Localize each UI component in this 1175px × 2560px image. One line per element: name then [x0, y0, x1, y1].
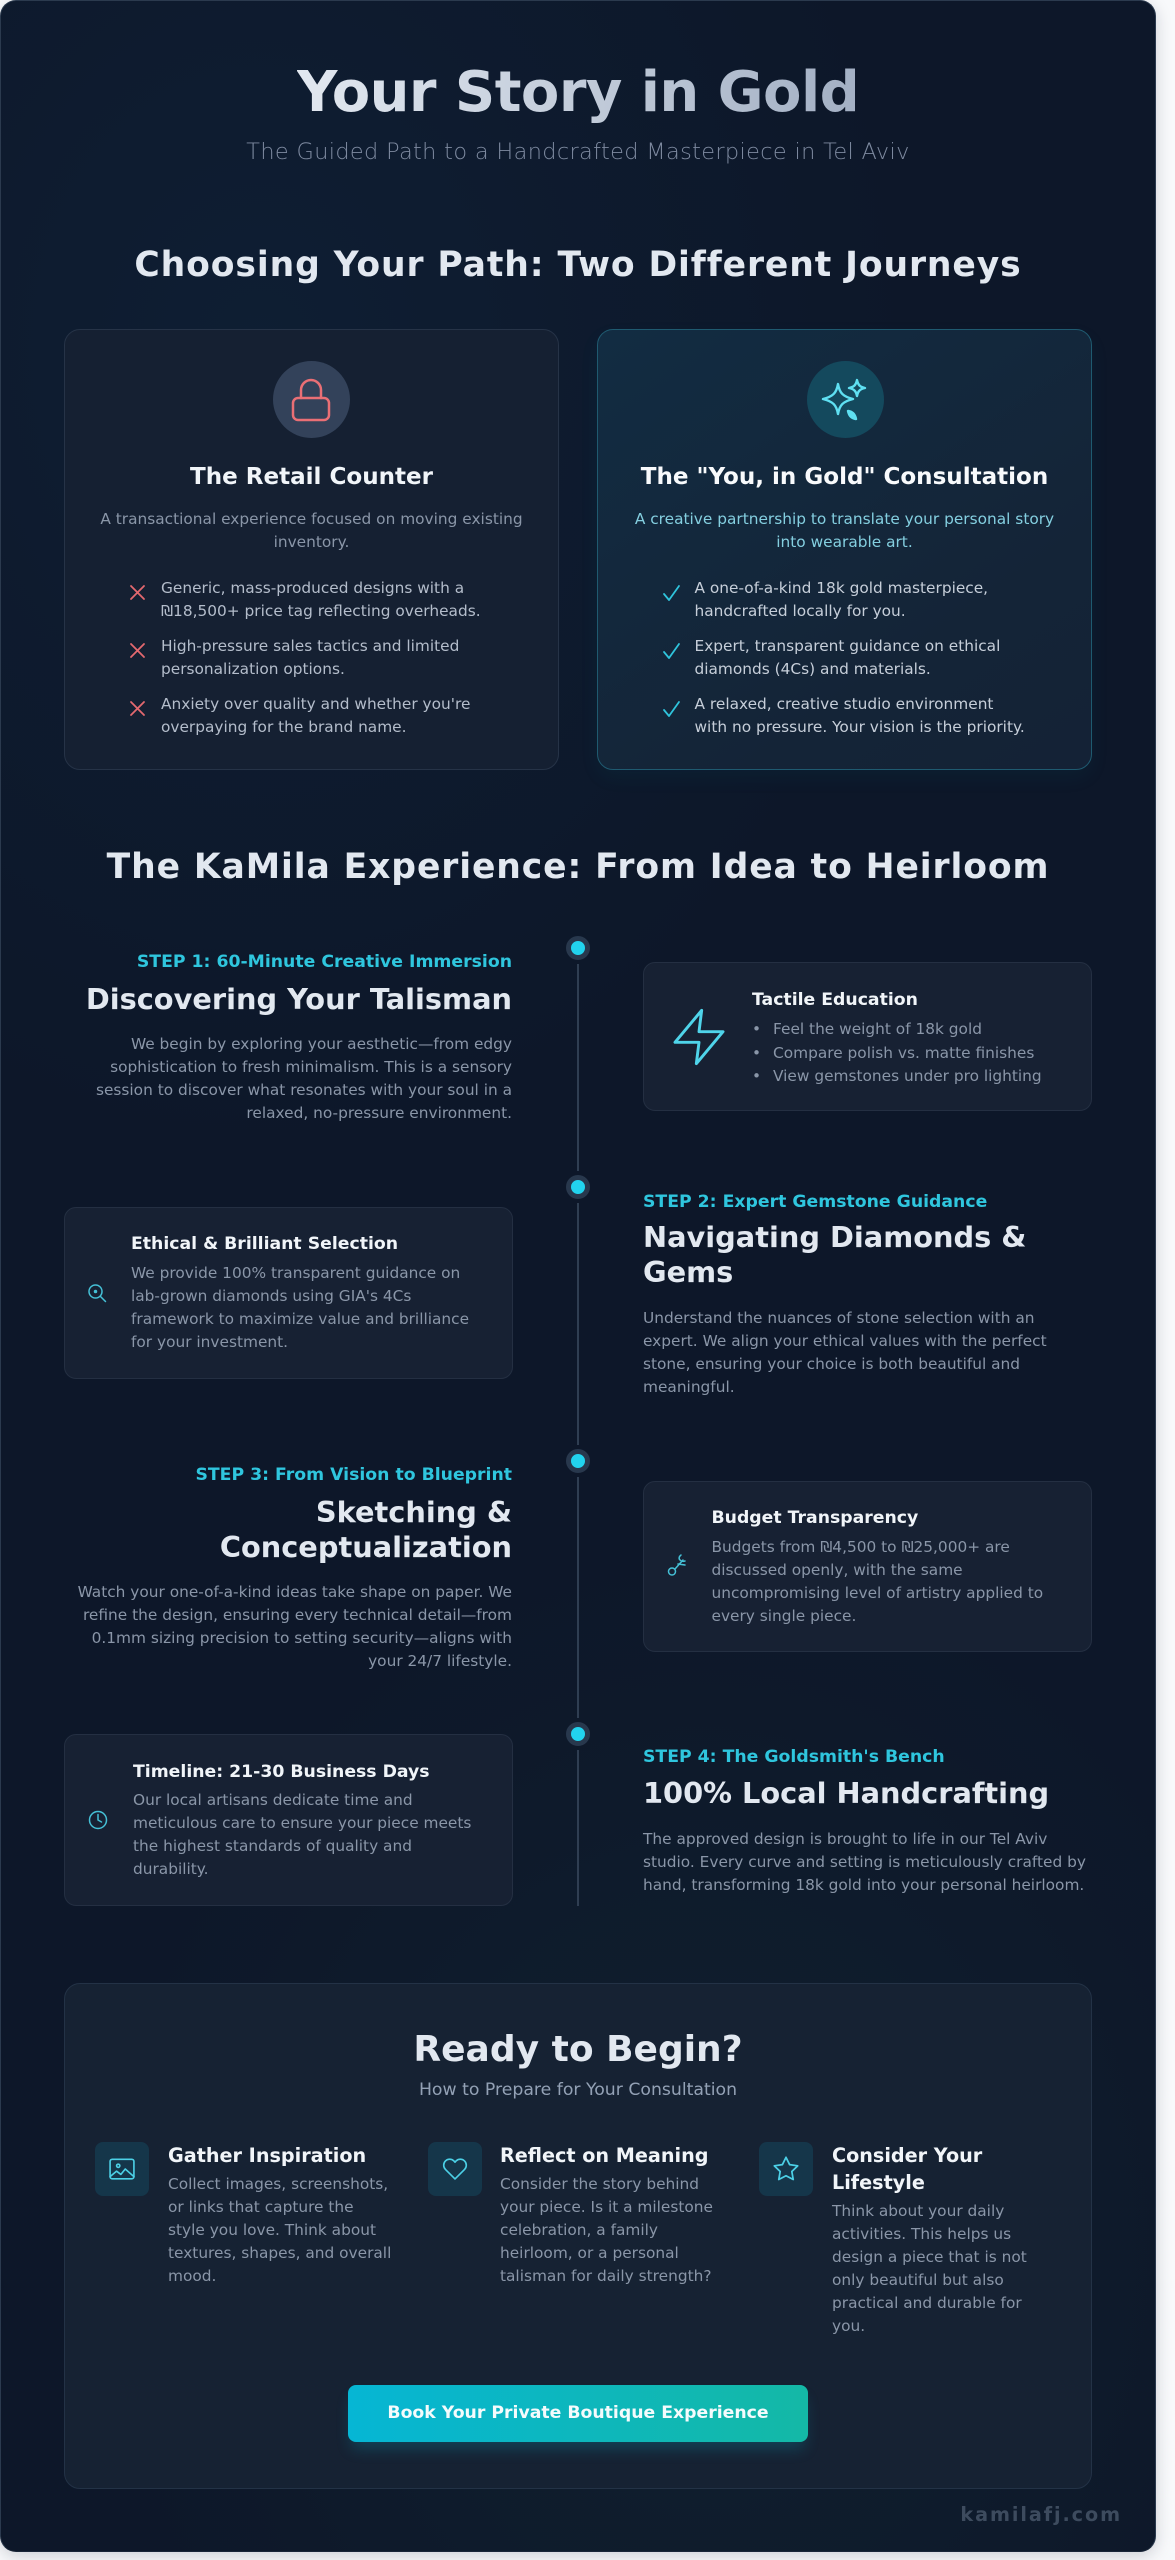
prep text: gather inspiration: mood.: [168, 2267, 216, 2285]
retail title: The Retail Counter: [190, 464, 433, 490]
prep text: reflect on meaning: heirloom, or a personal: [500, 2244, 679, 2262]
prep text: reflect on meaning: talisman for daily strength?: [500, 2267, 711, 2285]
step 2 heading: Navigating Diamonds &: [643, 1220, 1026, 1254]
cta heading: Ready to Begin?: [413, 2029, 743, 2070]
step 3 text: [78, 1583, 512, 1670]
step 2 text: stone, ensuring your choice is both beautiful and: [643, 1355, 1020, 1373]
icon: cross 1: [130, 585, 145, 600]
step 4 text: The approved design is brought to life in our Tel Aviv: [643, 1830, 1047, 1848]
tactile list: Compare polish vs. matte finishes: [773, 1044, 1034, 1062]
prep title: reflect on meaning: Reflect on Meaning: [500, 2144, 708, 2167]
heading: the kamila experience: The KaMila Experience: From Idea to Heirloom: [107, 847, 1049, 887]
timeline text: durability.: [133, 1860, 209, 1878]
item 3: Anxiety over quality and whether you're: [161, 695, 470, 713]
icon: lightning bolt: [674, 1008, 724, 1066]
ethical text: lab-grown diamonds using GIA's 4Cs: [131, 1287, 411, 1305]
prep title: consider your lifestyle: [832, 2144, 982, 2194]
panel: the retail counter: [64, 329, 559, 770]
icon: cross 3: [130, 701, 145, 716]
budget text: [712, 1538, 1043, 1625]
prep text: consider your lifestyle: only beautiful but also: [832, 2271, 1004, 2289]
budget text: uncompromising level of artistry applied to: [712, 1584, 1043, 1602]
button: book your experience: Book Your Private Boutique Experience: [387, 2403, 769, 2423]
prep text: consider your lifestyle: activities. This helps us: [832, 2225, 1011, 2243]
timeline text: the highest standards of quality and: [133, 1837, 412, 1855]
icon: check 2: [663, 643, 680, 659]
budget text: every single piece.: [712, 1607, 856, 1625]
item 2: Expert, transparent guidance on ethical: [694, 637, 1000, 655]
icon: check 3: [663, 701, 680, 717]
icon tile: star: [759, 2142, 813, 2196]
step 3 text: Watch your one-of-a-kind ideas take shape on paper. We: [78, 1583, 512, 1601]
item 2: High-pressure sales tactics and limited: [161, 637, 459, 655]
ethical text: [131, 1264, 469, 1351]
prep title: consider your lifestyle: Consider Your: [832, 2144, 982, 2167]
prep text: consider your lifestyle: practical and durable for: [832, 2294, 1022, 2312]
subtitle: The Guided Path to a Handcrafted Masterpiece in Tel Aviv: [246, 139, 910, 165]
icon: lock: [273, 361, 350, 438]
panel: ready to begin: [64, 1983, 1092, 2489]
step 4 heading: 100% Local Handcrafting: [643, 1776, 1049, 1810]
card: budget transparency: [643, 1481, 1092, 1652]
timeline dot 1: [566, 936, 590, 960]
prep text: reflect on meaning: [500, 2175, 713, 2285]
step 1 text: [96, 1035, 512, 1122]
prep text: consider your lifestyle: [832, 2202, 1027, 2335]
item 1: Generic, mass-produced designs with a: [161, 579, 464, 597]
step 1 text: sophistication to fresh minimalism. This is a sensory: [110, 1058, 512, 1076]
title: Your Story in Gold: [297, 60, 859, 125]
prep text: consider your lifestyle: design a piece that is not: [832, 2248, 1027, 2266]
retail description: A transactional experience focused on moving existing: [100, 510, 523, 528]
ethical text: for your investment.: [131, 1333, 288, 1351]
item 2: personalization options.: [161, 660, 345, 678]
prep text: gather inspiration: or links that capture the: [168, 2198, 354, 2216]
step 3 heading: Conceptualization: [220, 1530, 512, 1564]
icon tile: heart: [428, 2142, 482, 2196]
prep text: gather inspiration: [168, 2175, 391, 2285]
consultation description: [635, 510, 1054, 551]
icon: sparkles: [807, 361, 884, 438]
watermark: kamilafj.com: [960, 2503, 1122, 2526]
consultation title: The "You, in Gold" Consultation: [641, 464, 1048, 490]
step 4 text: studio. Every curve and setting is meticulously crafted by: [643, 1853, 1086, 1871]
item 3: with no pressure. Your vision is the priority.: [694, 718, 1025, 736]
step 2 text: [643, 1309, 1047, 1396]
step 1 heading: Discovering Your Talisman: [86, 982, 512, 1016]
item 2: [161, 637, 459, 678]
icon: clock: [88, 1810, 108, 1830]
timeline line segment 1: [577, 964, 579, 1171]
ethical text: We provide 100% transparent guidance on: [131, 1264, 460, 1282]
prep text: consider your lifestyle: you.: [832, 2317, 865, 2335]
step 2 label: STEP 2: Expert Gemstone Guidance: [643, 1192, 987, 1212]
prep text: gather inspiration: Collect images, screenshots,: [168, 2175, 388, 2193]
step 1 text: session to discover what resonates with your soul in a: [96, 1081, 512, 1099]
item 3: overpaying for the brand name.: [161, 718, 407, 736]
step 1 label: STEP 1: 60-Minute Creative Immersion: [137, 952, 512, 972]
timeline dot 2: [566, 1175, 590, 1199]
panel: you in gold consultation: [597, 329, 1092, 770]
icon: check 1: [663, 585, 680, 601]
budget text: Budgets from ₪4,500 to ₪25,000+ are: [712, 1538, 1010, 1556]
tactile title: Tactile Education: [752, 990, 918, 1010]
prep text: reflect on meaning: your piece. Is it a milestone: [500, 2198, 713, 2216]
step 3 text: refine the design, ensuring every technical detail—from: [83, 1606, 512, 1624]
timeline dot 3: [566, 1449, 590, 1473]
step 3 text: 0.1mm sizing precision to setting security—aligns with: [92, 1629, 512, 1647]
prep title: consider your lifestyle: Lifestyle: [832, 2171, 925, 2194]
item 2: [694, 637, 1000, 678]
tactile list: •: [752, 1044, 761, 1062]
consultation description: into wearable art.: [776, 533, 913, 551]
ethical text: framework to maximize value and brilliance: [131, 1310, 469, 1328]
icon tile: image: [95, 2142, 149, 2196]
prep text: consider your lifestyle: Think about your daily: [832, 2202, 1004, 2220]
timeline title: Timeline: 21-30 Business Days: [133, 1762, 430, 1782]
card: timeline: [64, 1734, 513, 1906]
icon: cross 2: [130, 643, 145, 658]
item 3: A relaxed, creative studio environment: [694, 695, 993, 713]
consultation description: A creative partnership to translate your personal story: [635, 510, 1054, 528]
step 4 label: STEP 4: The Goldsmith's Bench: [643, 1747, 945, 1767]
item 1: [161, 579, 481, 620]
timeline line segment 3: [577, 1477, 579, 1718]
tactile list: •: [752, 1020, 761, 1038]
step 2 text: Understand the nuances of stone selection with an: [643, 1309, 1034, 1327]
retail list: [130, 579, 481, 736]
item 3: [161, 695, 470, 736]
tactile list: •: [752, 1067, 761, 1085]
icon: scissors tool: [668, 1554, 686, 1576]
step 3 heading: Sketching &: [316, 1495, 512, 1529]
tactile list: [752, 1020, 1042, 1085]
timeline text: Our local artisans dedicate time and: [133, 1791, 413, 1809]
item 3: [694, 695, 1025, 736]
step 2 heading: Gems: [643, 1255, 733, 1289]
item 1: A one-of-a-kind 18k gold masterpiece,: [694, 579, 988, 597]
item 1: ₪18,500+ price tag reflecting overheads.: [161, 602, 481, 620]
step 2 text: expert. We align your ethical values with the perfect: [643, 1332, 1047, 1350]
prep text: reflect on meaning: celebration, a family: [500, 2221, 658, 2239]
timeline text: [133, 1791, 471, 1878]
card: tactile education: [643, 962, 1092, 1111]
step 3 text: your 24/7 lifestyle.: [368, 1652, 512, 1670]
icon: search diamond: [88, 1284, 106, 1302]
timeline line segment 2: [577, 1203, 579, 1445]
budget text: discussed openly, with the same: [712, 1561, 963, 1579]
step 2 text: meaningful.: [643, 1378, 735, 1396]
prep title: gather inspiration: Gather Inspiration: [168, 2144, 366, 2167]
step 1 text: relaxed, no-pressure environment.: [246, 1104, 512, 1122]
prep text: gather inspiration: style you love. Think about: [168, 2221, 376, 2239]
tactile list: Feel the weight of 18k gold: [773, 1020, 982, 1038]
cta subheading: How to Prepare for Your Consultation: [419, 2080, 737, 2100]
step 1 text: We begin by exploring your aesthetic—from edgy: [131, 1035, 512, 1053]
prep text: reflect on meaning: Consider the story behind: [500, 2175, 699, 2193]
step 4 text: [642, 1830, 1086, 1894]
retail description: inventory.: [274, 533, 349, 551]
button: book your experience: [348, 2385, 808, 2442]
item 1: handcrafted locally for you.: [694, 602, 906, 620]
heading: choosing your path: Choosing Your Path: Two Different Journeys: [134, 245, 1022, 285]
prep text: gather inspiration: textures, shapes, and overall: [168, 2244, 391, 2262]
budget title: Budget Transparency: [712, 1508, 918, 1528]
step 4 text: hand, transforming 18k gold into your personal heirloom.: [643, 1876, 1084, 1894]
timeline line segment 4: [577, 1750, 579, 1906]
retail description: [100, 510, 523, 551]
ethical title: Ethical & Brilliant Selection: [131, 1234, 398, 1254]
timeline dot 4: [566, 1722, 590, 1746]
consultation list: [663, 579, 1025, 736]
step 3 heading: [220, 1495, 512, 1564]
item 1: [694, 579, 988, 620]
step 3 label: STEP 3: From Vision to Blueprint: [195, 1465, 512, 1485]
card: ethical and brilliant selection: [64, 1207, 513, 1379]
timeline text: meticulous care to ensure your piece meets: [133, 1814, 471, 1832]
tactile list: View gemstones under pro lighting: [773, 1067, 1042, 1085]
item 2: diamonds (4Cs) and materials.: [694, 660, 931, 678]
step 2 heading: [643, 1220, 1026, 1289]
